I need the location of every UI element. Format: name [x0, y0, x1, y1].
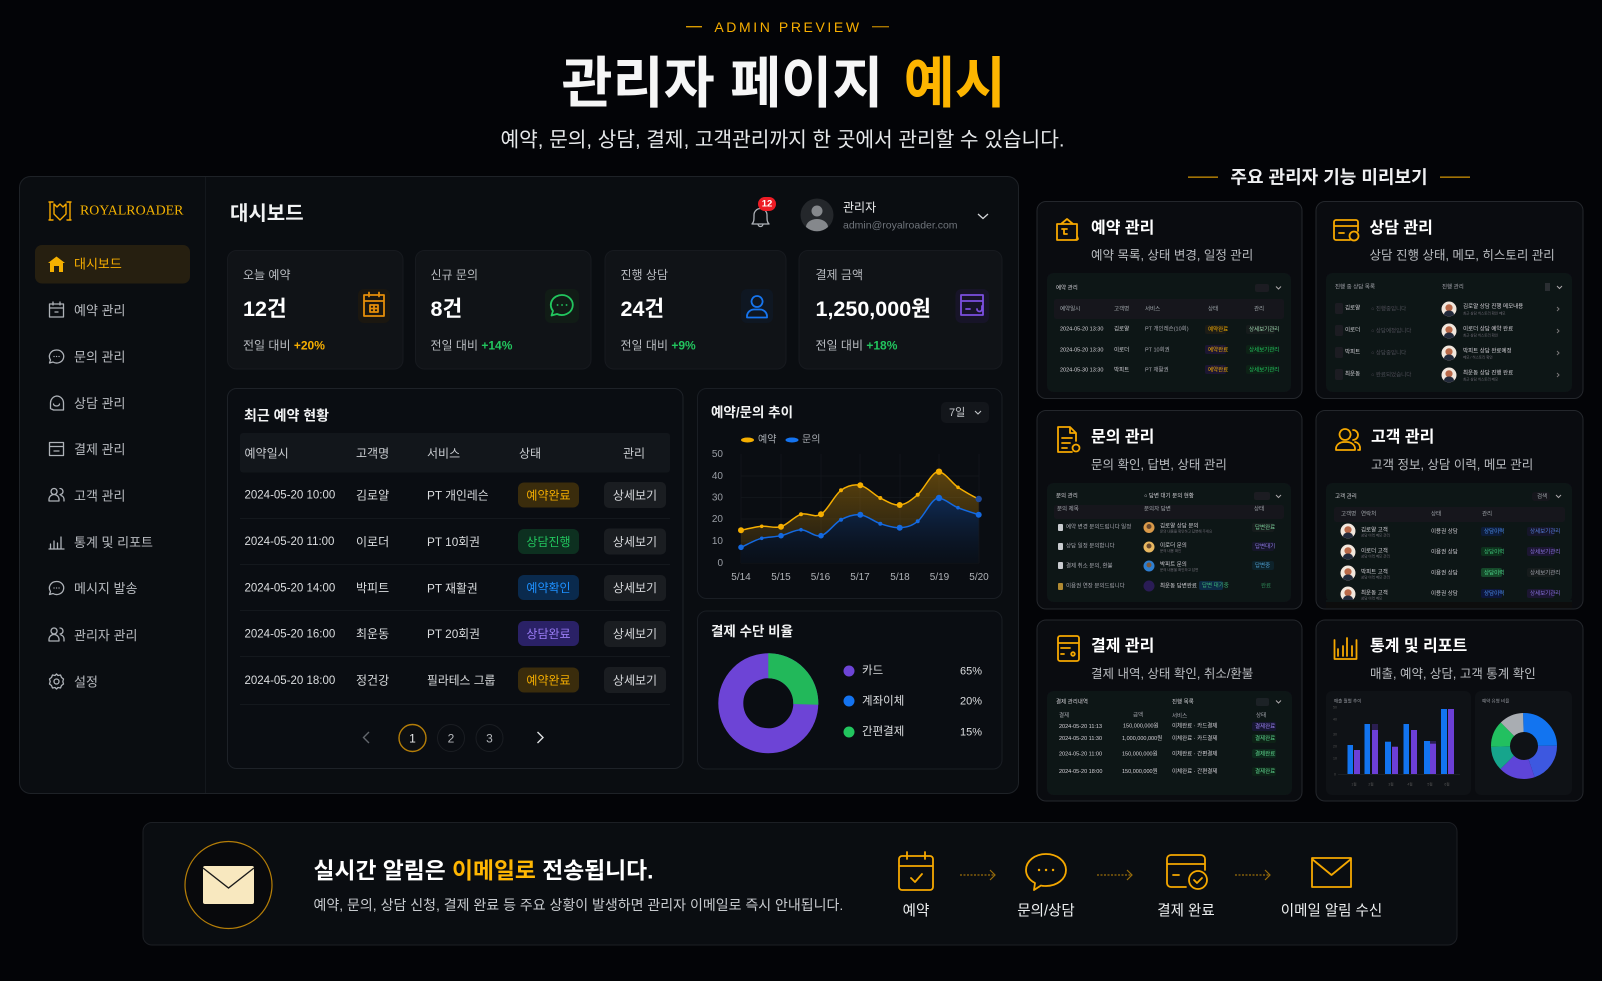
ratio legend: 카드 — [862, 664, 883, 677]
table row 3: PT 재활권 — [427, 582, 478, 596]
feature card: customers — [1316, 410, 1583, 609]
arrow head — [1127, 870, 1132, 880]
mini table: customers: 박피트 고객 — [1361, 568, 1388, 576]
mini table: reservations: 이로더 — [1114, 346, 1129, 354]
mini table: inquiries: ○ 답변 대기 문의 현황 — [1144, 492, 1194, 500]
feature card: payments — [1037, 620, 1302, 801]
table row 5: 예약완료 — [526, 673, 571, 688]
mini table: payments: 이체완료 · 카드결제 — [1172, 722, 1217, 730]
table row 3 — [244, 575, 666, 601]
step: email received — [1281, 858, 1382, 920]
bar chart: mini statistics: 2월 — [1368, 782, 1374, 787]
mini table: inquiries — [1047, 483, 1291, 602]
chart legend: 예약 — [758, 434, 776, 446]
mini list: consultations: 최근 상담 히스토리 확인 메모 — [1463, 311, 1506, 316]
mini table: customers: 이용권 상담 — [1431, 569, 1458, 577]
banner description: 예약, 문의, 상담 신청, 결제 완료 등 주요 상황이 발생하면 관리자 이메일로 즉시 안내됩니다. — [314, 897, 843, 913]
stat card: today's reservations — [228, 250, 403, 369]
y axis labels: 30 — [712, 493, 723, 504]
bar chart: mini statistics: 10 — [1333, 757, 1337, 761]
x axis labels: 5/20 — [969, 572, 989, 583]
table row 5: 2024-05-20 18:00 — [244, 675, 335, 687]
mini table: customers: 관리 — [1482, 510, 1492, 518]
mini table: reservations: 관리 — [1254, 305, 1264, 313]
mini table: payments: 이체완료 · 간편결제 — [1172, 750, 1217, 758]
mini table: reservations: 예약완료 — [1208, 325, 1228, 333]
arrow — [960, 874, 994, 876]
mini table: payments: 2024-05-20 11:30 — [1059, 736, 1102, 742]
mini table: reservations: PT 재활권 — [1145, 366, 1169, 374]
mini table: customers: 상세보기관리 — [1530, 589, 1560, 597]
mini table: reservations: 박피트 — [1114, 366, 1129, 374]
mini table: inquiries: 결제 취소 문의, 환불 — [1066, 562, 1113, 570]
mini table: reservations: 2024-05-20 13:30 — [1060, 348, 1103, 354]
table header row — [240, 433, 670, 472]
stat card: ongoing consultations — [605, 250, 786, 369]
area and line chart — [738, 468, 982, 563]
mini table: inquiries: 완료 — [1261, 582, 1271, 590]
step: inquiry: 문의/상담 — [1017, 903, 1075, 920]
feature card: inquiries: 문의 관리 — [1091, 428, 1154, 446]
mini table: reservations: 상태 — [1208, 305, 1218, 313]
table row 2: 2024-05-20 11:00 — [244, 536, 334, 548]
mini table: customers: 상담이력 — [1484, 589, 1504, 597]
table row 4 — [244, 621, 666, 647]
ratio legend: 간편결제 — [862, 725, 904, 738]
mini table: customers: 고객 관리 — [1335, 492, 1357, 500]
nav item: admins: 관리자 관리 — [74, 628, 137, 643]
table row 5: 필라테스 그룹 — [427, 674, 496, 688]
mini table: inquiries: 박피트 문의 — [1160, 560, 1187, 568]
table row 1: 상세보기 — [613, 489, 657, 503]
stat card: ongoing consultations: 전일 대비 +9% — [620, 339, 696, 353]
x axis labels — [731, 572, 989, 583]
mini table: customers: 상담 이력 메모 — [1361, 596, 1383, 601]
arrow — [1235, 874, 1269, 876]
bar chart: mini statistics: 1월 — [1351, 782, 1357, 787]
arrow head — [1265, 870, 1270, 880]
ratio legend: 20% — [960, 696, 982, 708]
nav item: payments: 결제 관리 — [74, 442, 125, 457]
feature card: reservations: 예약 목록, 상태 변경, 일정 관리 — [1091, 248, 1253, 263]
y axis labels — [712, 449, 723, 569]
mini table: customers: 이로더 고객 — [1361, 547, 1388, 555]
feature card: customers: 고객 정보, 상담 이력, 메모 관리 — [1371, 458, 1533, 472]
ratio legend — [844, 664, 982, 739]
mini table: payments: 서비스 — [1172, 712, 1187, 720]
mini table: customers: 상태 — [1431, 510, 1441, 518]
feature card: reservations — [1037, 202, 1302, 398]
ratio heading: 결제 수단 비율 — [711, 624, 793, 639]
y axis labels: 20 — [712, 514, 723, 525]
mini table: payments: 결제 — [1059, 711, 1069, 719]
nav item: reservations: 예약 관리 — [74, 303, 125, 318]
table header row: 상태 — [519, 447, 541, 461]
mini table: reservations: 2024-05-20 13:30 — [1060, 327, 1103, 333]
mini table: payments: 150,000,000원 — [1123, 722, 1159, 730]
panel: trend chart — [698, 388, 1002, 598]
mini table: payments: 2024-05-20 18:00 — [1059, 769, 1102, 775]
nav item: reservations — [50, 302, 125, 318]
bar chart: mini statistics: 4월 — [1407, 782, 1413, 787]
stat card: payment amount: 1,250,000원 — [816, 297, 931, 321]
stat card: today's reservations: 전일 대비 +20% — [243, 339, 325, 353]
mini table: customers: 고객명 — [1341, 511, 1356, 518]
mini table: customers: 상담 이력 메모 관리 — [1361, 533, 1390, 538]
mini table: inquiries: 답변 대기중 — [1202, 581, 1229, 589]
mini table: reservations: 서비스 — [1145, 305, 1160, 313]
logo: ROYALROADER — [80, 204, 184, 219]
table row 1: 김로얄 — [356, 488, 389, 503]
ratio legend: 65% — [960, 666, 982, 678]
mini table: inquiries: 상담 일정 문의합니다 — [1066, 542, 1115, 550]
pagination: 3 — [486, 732, 493, 746]
mini list: consultations: ○ 상담중입니다 — [1371, 349, 1406, 357]
mini table: inquiries: 문의 내용 확인 — [1160, 548, 1181, 553]
mini table: payments: 결제완료 — [1255, 750, 1275, 758]
arrow — [1097, 874, 1131, 876]
mini list: consultations: ○ 진행중입니다 — [1371, 305, 1406, 313]
x axis labels: 5/17 — [850, 572, 870, 583]
mini table: inquiries: 김로얄 상담 문의 — [1160, 522, 1198, 530]
feature card: consultations: 상담 관리 — [1370, 219, 1433, 237]
stat card: new inquiries: 8건 — [430, 297, 462, 321]
mini table: inquiries: 상태 — [1254, 505, 1264, 513]
admin profile: admin@royalroader.com — [843, 220, 958, 232]
mini table: payments: 상태 — [1256, 711, 1266, 719]
mini table: customers: 상세보기관리 — [1530, 569, 1560, 577]
title: 관리자 페이지 예시 — [562, 53, 1006, 115]
icon: bar chart — [1334, 638, 1356, 659]
feature card: statistics — [1316, 620, 1583, 801]
nav item: inquiries — [49, 350, 125, 365]
mini table: payments: 금액 — [1133, 712, 1143, 719]
bar chart: mini statistics: 40 — [1333, 718, 1337, 722]
arrow head — [990, 870, 995, 880]
mini table: reservations: PT 10회권 — [1145, 346, 1170, 354]
table row 4: 2024-05-20 16:00 — [244, 629, 335, 641]
bar chart: mini statistics: 3월 — [1388, 782, 1394, 787]
mini list: consultations: 김로얄 — [1345, 304, 1360, 312]
mini table: inquiries: 문의 관리 — [1056, 492, 1078, 500]
x axis labels: 5/18 — [890, 572, 910, 583]
mini table: customers: 상담이력 — [1484, 548, 1504, 556]
table header row: 고객명 — [356, 447, 389, 461]
step: inquiry — [1017, 854, 1075, 920]
icon: customers — [1336, 429, 1360, 450]
mini table: reservations: 상세보기관리 — [1249, 325, 1279, 333]
table row 3: 박피트 — [356, 581, 389, 595]
nav item: customers — [49, 488, 125, 504]
mini table: inquiries: 문의 내용을 확인하고 답변 — [1160, 567, 1198, 572]
chart legend — [741, 434, 820, 446]
mini list: consultations: 김로얄 상담 진행 메모내용 — [1463, 302, 1523, 310]
step: reservation — [899, 852, 933, 920]
y axis labels: 10 — [712, 536, 723, 547]
nav item: consultations — [50, 396, 125, 411]
mini list: consultations: 진행 관리 — [1442, 283, 1464, 291]
subtitle: 예약, 문의, 상담, 결제, 고객관리까지 한 곳에서 관리할 수 있습니다. — [500, 129, 1065, 152]
mini list: consultations — [1326, 273, 1572, 392]
bar chart: mini statistics: 0 — [1334, 773, 1336, 777]
feature card: statistics: 통계 및 리포트 — [1370, 637, 1467, 655]
nav item: messages: 메시지 발송 — [74, 581, 137, 596]
pagination: 2 — [448, 732, 455, 746]
stat card: new inquiries — [416, 250, 591, 369]
mini list: consultations: 박피트 — [1345, 348, 1360, 356]
mini list: consultations: 최운동 — [1345, 370, 1360, 378]
panel: recent reservations table — [228, 388, 683, 768]
mini table: reservations: 2024-05-30 13:30 — [1060, 368, 1103, 374]
sidebar navigation — [35, 245, 190, 690]
nav item: settings — [50, 674, 98, 690]
donut chart: mini statistics: 예약 유형 비율 — [1482, 698, 1509, 705]
table row 1: 예약완료 — [526, 488, 571, 503]
table row 4: PT 20회권 — [427, 627, 480, 641]
panel: dashboard — [20, 168, 1583, 945]
bar chart: mini statistics: 5월 — [1427, 782, 1433, 787]
table row 3: 예약확인 — [526, 580, 571, 595]
section heading: feature preview: 주요 관리자 기능 미리보기 — [1230, 168, 1428, 188]
bar chart: mini statistics: 50 — [1333, 706, 1337, 710]
feature card: inquiries: 문의 확인, 답변, 상태 관리 — [1091, 458, 1227, 472]
feature card: customers: 고객 관리 — [1371, 428, 1434, 446]
mini list: consultations: ○ 상담예정입니다 — [1371, 327, 1411, 335]
table row 5 — [244, 667, 666, 693]
bar chart: mini statistics: 20 — [1333, 745, 1337, 749]
donut chart: mini statistics — [1475, 691, 1572, 795]
y axis labels: 0 — [717, 558, 723, 569]
mini table: payments: 이체완료 · 간편결제 — [1172, 767, 1217, 775]
table row 3: 2024-05-20 14:00 — [244, 583, 335, 595]
notification bell with badge — [752, 197, 776, 226]
mini list: consultations: 이로더 — [1345, 326, 1360, 334]
mini table: reservations — [1047, 273, 1291, 392]
mini list: consultations: 최운동 상담 진행 완료 — [1463, 369, 1513, 377]
donut chart — [731, 653, 818, 741]
mini table: payments: 결제 관리내역 — [1056, 698, 1088, 706]
chart legend: 문의 — [802, 434, 820, 446]
table row 5: 상세보기 — [613, 674, 657, 688]
mini table: customers: 검색 — [1537, 492, 1547, 500]
mini table: customers: 연락처 — [1361, 510, 1376, 518]
feature card: reservations: 예약 관리 — [1091, 219, 1154, 237]
icon: envelope in ring — [185, 842, 272, 928]
mini table: payments: 150,000,000원 — [1122, 750, 1158, 758]
pagination — [364, 724, 543, 752]
stat card: new inquiries: 전일 대비 +14% — [430, 339, 513, 353]
mini table: inquiries: 답변중 — [1255, 561, 1270, 569]
mini table: payments: 2024-05-20 11:13 — [1059, 724, 1102, 730]
step: payment complete — [1157, 855, 1215, 920]
stat card: ongoing consultations: 24건 — [620, 297, 664, 321]
panel: email notification banner — [143, 822, 1457, 945]
feature card: statistics: 매출, 예약, 상담, 고객 통계 확인 — [1370, 666, 1536, 681]
mini table: inquiries: 이로더 문의 — [1160, 541, 1187, 549]
eyebrow: admin preview: ADMIN PREVIEW — [714, 19, 862, 35]
x axis labels: 5/19 — [930, 572, 950, 583]
x axis labels: 5/16 — [811, 572, 831, 583]
ratio legend: 계좌이체 — [862, 695, 904, 708]
stat card: payment amount: 결제 금액 — [816, 268, 863, 282]
ratio legend: 15% — [960, 727, 982, 739]
icon: inquiry document — [1058, 427, 1076, 452]
mini table: reservations: 상세보기관리 — [1249, 346, 1279, 354]
mini table: payments: 150,000,000원 — [1122, 767, 1158, 775]
feature card: inquiries — [1037, 410, 1302, 609]
stat card: today's reservations: 오늘 예약 — [243, 267, 290, 282]
mini list: consultations: 메모 / 히스토리 확인 — [1463, 355, 1493, 360]
table heading: 최근 예약 현황 — [244, 408, 329, 424]
nav item: consultations: 상담 관리 — [74, 396, 125, 411]
feature card: consultations: 상담 진행 상태, 메모, 히스토리 관리 — [1370, 248, 1555, 263]
nav item: statistics: 통계 및 리포트 — [74, 535, 153, 550]
feature card: consultations — [1316, 202, 1583, 398]
table header row: 관리 — [623, 447, 645, 461]
nav item: dashboard active: 대시보드 — [74, 257, 122, 272]
table row 2: 상세보기 — [613, 535, 657, 549]
notification bell with badge: 12 — [762, 199, 772, 210]
period dropdown: 7일 — [949, 405, 965, 419]
mini table: customers: 최운동 고객 — [1361, 589, 1388, 597]
table row 2: 상담진행 — [526, 534, 571, 549]
mini table: inquiries: 문의자 답변 — [1144, 505, 1171, 513]
feature card: payments: 결제 내역, 상태 확인, 취소/환불 — [1091, 667, 1253, 681]
mini table: customers: 상담 이력 메모 관리 — [1361, 575, 1390, 580]
mini table: inquiries: 답변완료 — [1255, 523, 1275, 531]
table row 2 — [244, 528, 666, 554]
bar chart: mini statistics: 30 — [1333, 733, 1337, 737]
mini table: inquiries: 이용권 연장 문의드립니다 — [1066, 582, 1125, 590]
step: reservation: 예약 — [903, 903, 929, 920]
y axis labels: 50 — [712, 449, 723, 460]
mini table: payments: 결제완료 — [1255, 734, 1275, 742]
stat card: today's reservations: 12건 — [243, 297, 287, 321]
dashboard heading: 대시보드 — [230, 202, 304, 225]
mini table: reservations: 김로얄 — [1114, 325, 1129, 333]
bar chart: mini statistics — [1326, 691, 1471, 795]
mini table: reservations: 예약일시 — [1060, 305, 1080, 313]
table row 1 — [244, 482, 666, 508]
pagination: 1 — [409, 732, 416, 746]
x axis labels: 5/14 — [731, 572, 751, 583]
icon: reservation — [1057, 219, 1078, 240]
period dropdown — [941, 402, 989, 423]
mini table: inquiries: 문의 내용을 확인하고 답변해 주세요 — [1160, 529, 1213, 534]
nav item: customers: 고객 관리 — [74, 489, 125, 504]
nav item: settings: 설정 — [74, 675, 98, 690]
stat card: payment amount: 전일 대비 +18% — [816, 339, 898, 353]
icon: consultation card — [1334, 220, 1358, 240]
mini table: customers: 이용권 상담 — [1431, 589, 1458, 597]
nav item: dashboard active — [35, 245, 190, 284]
mini table: customers — [1326, 483, 1572, 608]
mini list: consultations: 이로더 상담 예약 완료 — [1463, 325, 1513, 333]
step: email received: 이메일 알림 수신 — [1281, 903, 1382, 920]
mini table: customers: 상세보기관리 — [1530, 548, 1560, 556]
mini table: payments: 1,000,000,000원 — [1122, 734, 1162, 742]
mini table: inquiries: 답변대기 — [1255, 542, 1275, 550]
nav item: inquiries: 문의 관리 — [74, 350, 125, 365]
bar chart: mini statistics: 6월 — [1444, 782, 1450, 787]
mini table: customers: 상담이력 — [1484, 527, 1504, 535]
mini table: inquiries: 예약 변경 문의드립니다 일정 — [1066, 523, 1131, 531]
mini table: payments: 결제완료 — [1255, 767, 1275, 775]
stat card: new inquiries: 신규 문의 — [430, 268, 478, 282]
table row 2: PT 10회권 — [427, 535, 480, 549]
nav item: payments — [50, 442, 125, 457]
admin profile: 관리자 — [843, 201, 876, 215]
mini table: customers: 이용권 상담 — [1431, 548, 1458, 556]
mini table: payments — [1047, 691, 1292, 795]
table header row: 서비스 — [427, 447, 460, 461]
mini table: inquiries: 최운동 답변완료 — [1160, 582, 1197, 590]
mini list: consultations: 최근 상담 히스토리 확인 — [1463, 333, 1498, 338]
admin profile — [800, 198, 988, 232]
logo — [49, 202, 184, 220]
mini table: payments: 이체완료 · 카드결제 — [1172, 734, 1217, 742]
panel: payment method ratio — [698, 611, 1002, 769]
table row 4: 상담완료 — [526, 627, 571, 641]
bar chart: mini statistics: 매출 월별 추이 — [1334, 698, 1361, 705]
table row 3: 상세보기 — [613, 581, 657, 595]
mini table: customers: 이용권 상담 — [1431, 527, 1458, 535]
mini table: reservations: PT 개인레슨(10회) — [1145, 325, 1189, 333]
mini table: payments: 2024-05-20 11:00 — [1059, 752, 1102, 758]
table row 4: 상세보기 — [613, 627, 657, 641]
step: payment complete: 결제 완료 — [1157, 903, 1215, 920]
table row 2: 이로더 — [356, 535, 389, 549]
stat card: payment amount — [799, 250, 1002, 369]
table row 1: 2024-05-20 10:00 — [244, 490, 335, 502]
mini table: customers: 상담 이력 메모 관리 — [1361, 554, 1390, 559]
mini table: customers: 김로얄 고객 — [1361, 526, 1388, 534]
mini table: customers: 상담이력 — [1484, 569, 1504, 577]
mini table: reservations: 예약완료 — [1208, 366, 1228, 374]
table row 5: 정건강 — [356, 674, 389, 688]
mini table: reservations: 상세보기관리 — [1249, 366, 1279, 374]
mini table: customers: 상세보기관리 — [1530, 527, 1560, 535]
feature card: payments: 결제 관리 — [1091, 637, 1154, 655]
mini list: consultations: ○ 완료되었습니다 — [1371, 371, 1411, 379]
x axis labels: 5/15 — [771, 572, 791, 583]
mini table: payments: 진행 목록 — [1172, 698, 1194, 706]
mini table: reservations: 예약 관리 — [1056, 284, 1078, 292]
mini table: reservations: 고객명 — [1114, 306, 1129, 313]
banner heading: 실시간 알림은 이메일로 전송됩니다. — [314, 858, 653, 884]
chart heading: 예약/문의 추이 — [711, 405, 793, 420]
mini list: consultations: 진행 중 상담 목록 — [1335, 283, 1375, 291]
y axis labels: 40 — [712, 471, 723, 482]
stat card: ongoing consultations: 진행 상담 — [620, 267, 668, 282]
mini table: reservations: 예약완료 — [1208, 346, 1228, 354]
table row 4: 최운동 — [356, 627, 389, 641]
mini list: consultations: 박피트 상담 완료예정 — [1463, 347, 1512, 355]
table row 1: PT 개인레슨 — [427, 489, 489, 503]
mini table: inquiries: 문의 제목 — [1057, 505, 1079, 513]
table header row: 예약일시 — [244, 446, 289, 461]
mini list: consultations: 최근 상담 히스토리 메모 — [1463, 377, 1499, 382]
mini table: payments: 결제완료 — [1255, 722, 1275, 730]
icon: payment card — [1058, 636, 1079, 661]
